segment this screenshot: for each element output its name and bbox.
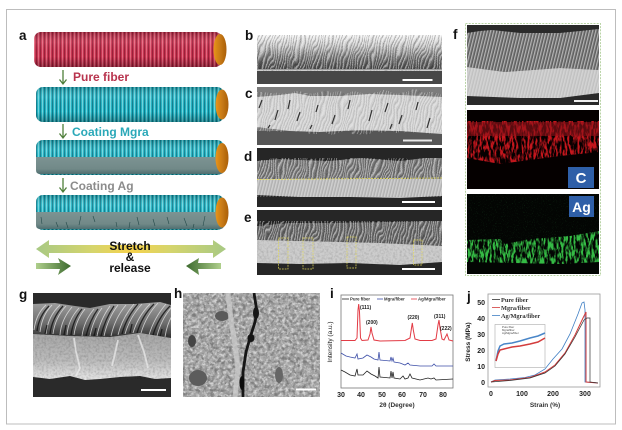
arrow: Ag to stretched xyxy=(60,178,66,192)
silver map xyxy=(467,194,599,274)
SEM image b xyxy=(257,35,442,84)
fiber: Ag coated xyxy=(36,140,228,175)
XRD peak labels: (311) xyxy=(434,314,446,320)
XRD axis ticks: 50 xyxy=(378,392,386,399)
silver label: Ag xyxy=(572,199,591,215)
fiber: Mgra coated (cyan) xyxy=(36,87,228,122)
inset plot: Pure fiber xyxy=(502,325,514,329)
fiber: pure (red) xyxy=(34,32,226,67)
XRD curve: pure fiber xyxy=(341,367,453,380)
SEM image g xyxy=(33,293,172,397)
panel i: XRD chart xyxy=(327,286,453,409)
panel label j: j xyxy=(466,289,471,304)
label: stretch and release: Stretch xyxy=(109,239,151,253)
XRD peak labels xyxy=(360,305,452,332)
stress-strain axis ticks: 20 xyxy=(477,348,485,355)
arrow: pure to Mgra xyxy=(60,70,66,84)
XRD peak labels: (200) xyxy=(366,320,378,326)
XRD peak labels: (220) xyxy=(408,315,420,321)
scale bar d xyxy=(402,201,435,203)
stress-strain legend: Mgra/fiber xyxy=(501,305,531,312)
panel label b: b xyxy=(245,28,253,43)
label: pure fiber: Pure fiber xyxy=(73,70,129,84)
arrow: Mgra to Ag xyxy=(60,124,66,138)
XRD axis ticks: 40 xyxy=(357,392,365,399)
SEM image c xyxy=(250,87,450,145)
scale bar f xyxy=(574,100,598,102)
inset plot xyxy=(495,324,545,368)
arrow: release right xyxy=(36,258,71,275)
stress-strain axis ticks: 40 xyxy=(477,316,485,323)
scale bar e xyxy=(402,268,435,270)
panel j: stress-strain chart xyxy=(465,289,600,409)
XRD legend: Ag/Mgra/fiber xyxy=(418,296,446,302)
stress-strain axis ticks: 30 xyxy=(477,332,485,339)
XRD legend xyxy=(342,296,446,302)
label: stretch and release xyxy=(109,239,151,275)
carbon label xyxy=(568,167,594,188)
XRD axis ticks: 30 xyxy=(337,392,345,399)
panel c: SEM xyxy=(245,86,450,145)
panel label g: g xyxy=(19,287,27,302)
stress-strain axis ticks: 0 xyxy=(481,380,485,387)
XRD legend: Mgra/fiber xyxy=(384,296,405,302)
scale bar b xyxy=(402,79,432,81)
label: stretch and release: & xyxy=(126,250,135,264)
label: coating Ag: Coating Ag xyxy=(70,179,134,193)
curve: pure fiber xyxy=(491,318,598,383)
curve: Mgra/fiber xyxy=(491,312,598,383)
panel h: SEM high magnification xyxy=(174,286,320,397)
panel d: SEM xyxy=(244,148,442,207)
XRD plot xyxy=(341,295,453,388)
fiber: cracked Ag coating xyxy=(36,195,228,230)
panel label i: i xyxy=(330,286,334,301)
stress-strain y-axis label: Stress (MPa) xyxy=(465,322,472,362)
stress-strain axis ticks: 10 xyxy=(477,364,485,371)
label: coating Mgra: Coating Mgra xyxy=(72,125,149,139)
panel label e: e xyxy=(244,210,252,225)
panel f: EDS maps xyxy=(453,24,600,276)
XRD axis ticks: 70 xyxy=(419,392,427,399)
panel label f: f xyxy=(453,27,458,42)
arrow: stretch double arrow xyxy=(36,240,226,258)
inset plot: Mgra/fiber xyxy=(502,328,515,332)
SEM image h xyxy=(183,293,320,397)
stress-strain x-axis label: Strain (%) xyxy=(530,402,560,409)
XRD peak labels: (111) xyxy=(360,305,371,311)
panel label a: a xyxy=(19,28,27,43)
SEM image e xyxy=(250,210,450,275)
dashed frame f xyxy=(466,24,600,276)
XRD x-axis label: 2θ (Degree) xyxy=(379,402,415,409)
panel label c: c xyxy=(245,86,253,101)
stress-strain axis ticks: 300 xyxy=(579,391,591,398)
carbon label: C xyxy=(576,170,587,187)
scale bar g xyxy=(141,389,166,391)
XRD axis ticks: 60 xyxy=(398,392,406,399)
crack markers e xyxy=(278,237,422,269)
stress-strain axis ticks: 100 xyxy=(516,391,528,398)
stress-strain axis ticks xyxy=(477,300,591,398)
stress-strain axis ticks: 0 xyxy=(489,391,493,398)
XRD curve: Mgra/fiber xyxy=(341,352,453,366)
scale bar c xyxy=(403,140,432,142)
panel label h: h xyxy=(174,286,182,301)
stress-strain legend: Ag/Mgra/fiber xyxy=(501,313,540,320)
XRD y-axis label: Intensity (a.u.) xyxy=(327,321,334,363)
XRD axis ticks xyxy=(337,392,447,399)
XRD legend: Pure fiber xyxy=(350,296,370,302)
dashed guide line d xyxy=(257,178,442,180)
XRD axis ticks: 80 xyxy=(439,392,447,399)
stress-strain legend xyxy=(492,297,540,320)
XRD curve: Ag/Mgra/fiber xyxy=(341,304,453,341)
inset plot: Ag/Mgra/fiber xyxy=(502,331,519,335)
carbon map xyxy=(467,110,599,189)
curve: Ag/Mgra/fiber xyxy=(491,302,598,383)
stress-strain plot xyxy=(488,294,600,387)
stress-strain axis ticks: 200 xyxy=(547,391,559,398)
panel e: SEM xyxy=(244,210,450,275)
stress-strain legend: Pure fiber xyxy=(501,297,529,304)
scale bar h xyxy=(296,388,316,390)
arrow: release left xyxy=(186,258,221,275)
panel g: SEM close-up xyxy=(19,287,172,397)
silver label xyxy=(569,196,594,217)
panel b: SEM xyxy=(245,28,450,84)
label: stretch and release: release xyxy=(109,261,151,275)
stress-strain axis ticks: 50 xyxy=(477,300,485,307)
panel label d: d xyxy=(244,149,252,164)
XRD peak labels: (222) xyxy=(440,326,452,332)
SEM image d xyxy=(257,148,442,207)
SEM image f xyxy=(467,25,599,105)
panel a: fiber schematic xyxy=(19,28,228,275)
